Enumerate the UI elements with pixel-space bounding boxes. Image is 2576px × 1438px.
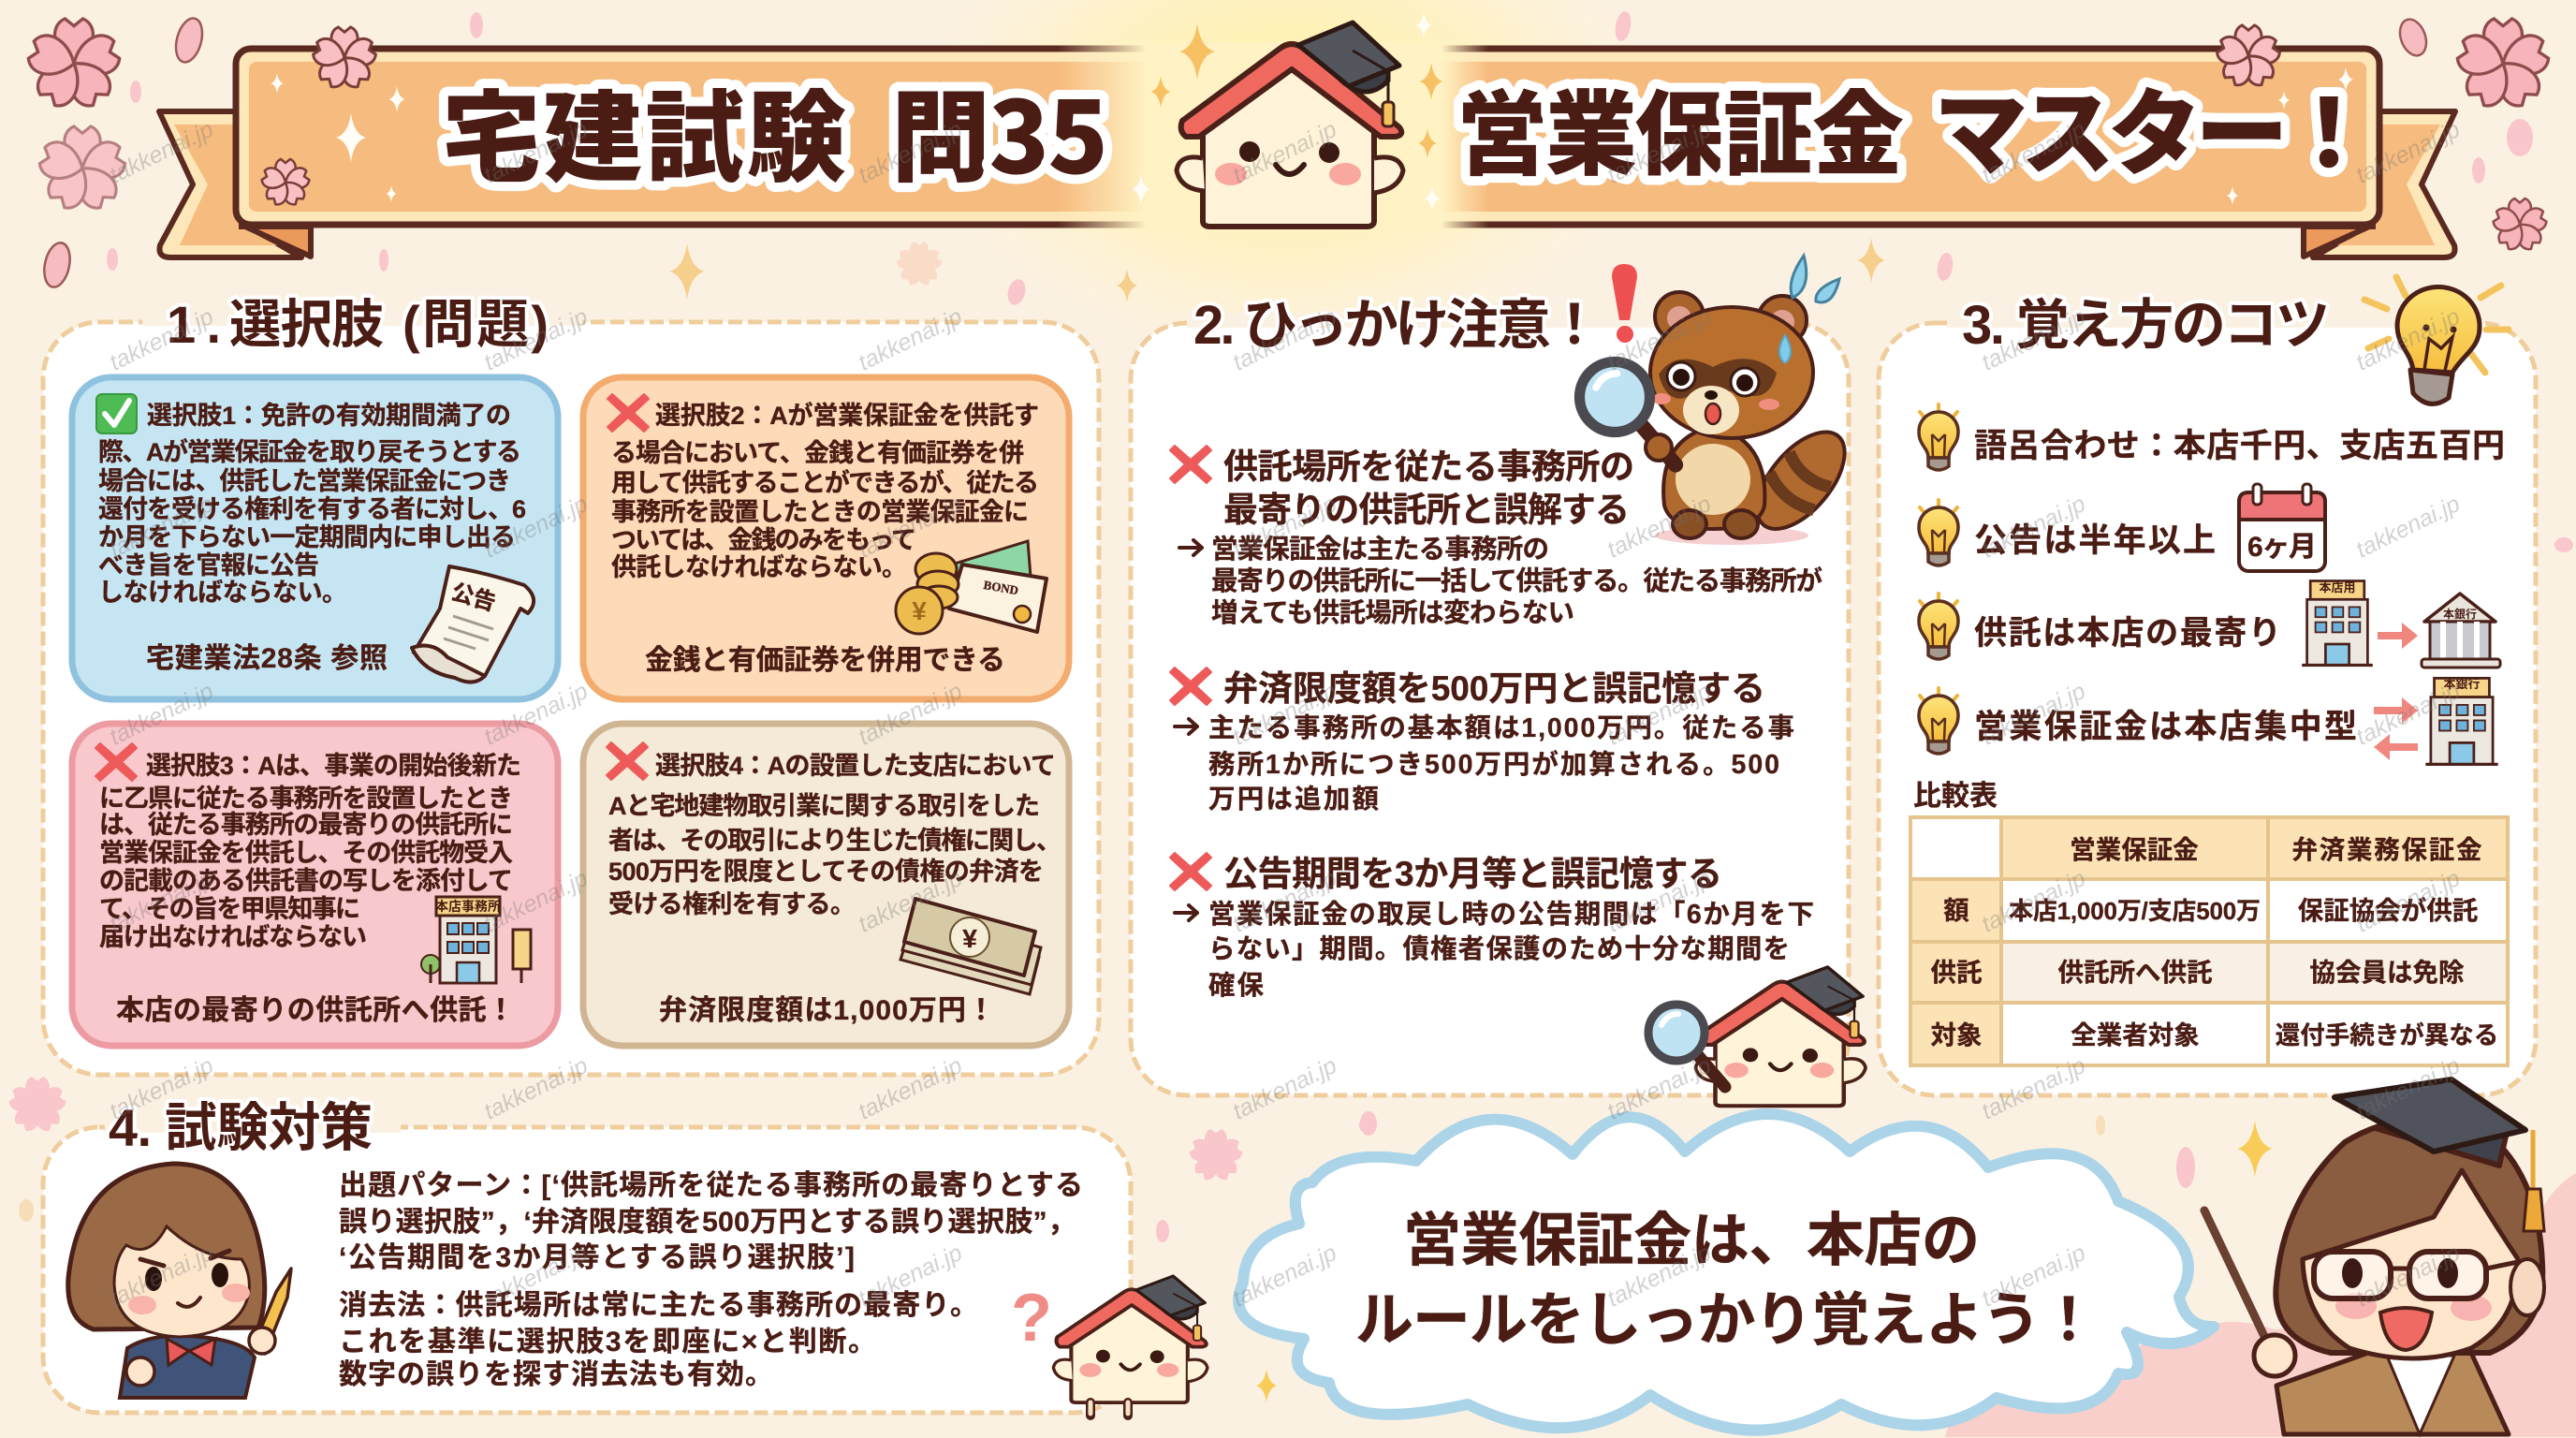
card text xyxy=(608,752,1061,918)
card text: しなければならない。 xyxy=(98,579,347,607)
card footer: 本店の最寄りの供託所へ供託！ xyxy=(116,995,515,1026)
heading 3: 3. 覚え方のコツ xyxy=(1962,295,2330,356)
title right xyxy=(1456,58,2376,194)
question patterns: 出題パターン：[‘供託場所を従たる事務所の最寄りとする xyxy=(339,1170,1083,1201)
icon: notice scroll: 公告 xyxy=(448,580,499,616)
card text: 届け出なければならない xyxy=(99,923,367,951)
card text xyxy=(98,402,526,607)
icon: cross xyxy=(95,743,137,781)
watermarks: takkenai.jp xyxy=(1229,678,1340,751)
heading 1 xyxy=(167,295,549,354)
card footer: 宅建業法28条 参照 xyxy=(146,643,388,674)
tip 2: 公告は半年以上 xyxy=(1974,522,2216,559)
watermarks: takkenai.jp xyxy=(2352,1052,2464,1125)
card text: 際、Aが営業保証金を取り戻そうとする xyxy=(98,437,521,466)
card text: 者は、その取引により生じた債権に関し、 xyxy=(608,827,1061,855)
watermarks: takkenai.jp xyxy=(1603,303,1715,376)
watermarks: takkenai.jp xyxy=(2352,865,2464,938)
trap item 1: 増えても供託場所は変わらない xyxy=(1211,598,1574,628)
title left: 宅建試験 xyxy=(442,58,846,202)
watermarks: takkenai.jp xyxy=(2352,1240,2464,1313)
icon: money and bond: BOND xyxy=(983,578,1019,597)
card text: 選択肢1：免許の有効期間満了の xyxy=(147,402,511,430)
watermarks: takkenai.jp xyxy=(1978,1240,2089,1313)
watermarks: takkenai.jp xyxy=(480,303,592,376)
comparison table: 本店1,000万/支店500万 xyxy=(2009,897,2261,925)
watermarks: takkenai.jp xyxy=(2352,491,2464,564)
icon: red exclamation xyxy=(1612,264,1637,343)
comparison table: 弁済業務保証金 xyxy=(2291,835,2482,864)
card text: 供託しなければならない。 xyxy=(611,553,907,581)
watermarks: takkenai.jp xyxy=(1229,303,1340,376)
card text: 選択肢2：Aが営業保証金を供託す xyxy=(655,401,1039,430)
heading 2: 2. ひっかけ注意！ xyxy=(1193,295,1602,356)
title left xyxy=(442,58,1108,202)
watermarks: takkenai.jp xyxy=(1603,1240,1715,1313)
watermarks: takkenai.jp xyxy=(106,303,217,376)
watermarks: takkenai.jp xyxy=(1603,491,1715,564)
card text: 還付を受ける権利を有する者に対し、6 xyxy=(98,495,526,523)
trap item 1 xyxy=(1170,446,1822,628)
watermarks: takkenai.jp xyxy=(1603,678,1715,751)
bubble text: ルールをしっかり覚えよう！ xyxy=(1355,1288,2098,1353)
watermarks: takkenai.jp xyxy=(2352,678,2464,751)
trap item 2: 万円は追加額 xyxy=(1208,785,1379,814)
bubble text: 営業保証金は、本店の xyxy=(1403,1209,1980,1273)
card text: 500万円を限度としてその債権の弁済を xyxy=(608,858,1044,886)
speech bubble xyxy=(1238,1114,2214,1431)
watermarks: takkenai.jp xyxy=(1978,1052,2089,1125)
icon: arrows to head office xyxy=(2374,677,2498,764)
comparison table: 供託所へ供託 xyxy=(2057,958,2213,987)
question patterns: ‘公告期間を3か月等とする誤り選択肢’] xyxy=(339,1242,855,1273)
pink cloud backdrop xyxy=(1945,1173,2576,1437)
tip 3 xyxy=(1919,594,2281,659)
trap item 1: 最寄りの供託所と誤解する xyxy=(1223,491,1630,529)
icon: money and bond: ¥ xyxy=(912,596,927,625)
watermarks: takkenai.jp xyxy=(855,678,966,751)
icon: tanuki with magnifier xyxy=(1580,256,1861,545)
card text: は、従たる事務所の最寄りの供託所に xyxy=(99,811,513,839)
watermarks: takkenai.jp xyxy=(1603,116,1715,189)
panel: 3 memory tips xyxy=(1879,277,2536,1095)
card text: 用して供託することができるが、従たる xyxy=(611,468,1039,497)
trap item 3: 公告期間を3か月等と誤記憶する xyxy=(1223,855,1722,893)
banner body xyxy=(236,49,2379,225)
icon: banknotes: ¥ xyxy=(962,924,977,953)
card text: ついては、金銭のみをもって xyxy=(611,526,916,554)
card text: に乙県に従たる事務所を設置したとき xyxy=(99,785,513,813)
watermarks: takkenai.jp xyxy=(1978,303,2089,376)
elimination method: 消去法：供託場所は常に主たる事務所の最寄り。 xyxy=(339,1290,978,1321)
icon: check xyxy=(96,394,137,433)
icon: cross xyxy=(607,742,648,780)
banner sparkles xyxy=(271,12,2353,212)
card: choice 2 xyxy=(583,377,1069,699)
tip 1 xyxy=(1919,404,2505,470)
icon: arrows to head office: 本銀行 xyxy=(2443,677,2481,691)
card text: べき旨を官報に公告 xyxy=(98,551,319,580)
comparison table: 供託 xyxy=(1930,958,1983,987)
icon: question house: ? xyxy=(1011,1281,1052,1356)
watermarks: takkenai.jp xyxy=(1229,1052,1340,1125)
watermarks: takkenai.jp xyxy=(106,1240,217,1313)
elimination method xyxy=(339,1290,978,1390)
trap item 2: 務所1か所につき500万円が加算される。500 xyxy=(1208,749,1779,780)
card: choice 4 xyxy=(583,724,1069,1046)
watermarks: takkenai.jp xyxy=(1978,116,2089,189)
card text: 営業保証金を供託し、その供託物受入 xyxy=(99,839,513,867)
trap item 2: 主たる事務所の基本額は1,000万円。従たる事 xyxy=(1208,713,1794,743)
icon: banknotes xyxy=(900,899,1041,994)
comparison table: 額 xyxy=(1943,896,1969,925)
watermarks: takkenai.jp xyxy=(855,116,966,189)
icon: main house mascot xyxy=(1177,22,1403,227)
watermarks: takkenai.jp xyxy=(480,1052,592,1125)
card text: 事務所を設置したときの営業保証金に xyxy=(611,498,1029,526)
comparison table: 全業者対象 xyxy=(2071,1020,2200,1049)
heading 1: (問題) xyxy=(402,295,549,354)
watermarks: takkenai.jp xyxy=(855,1240,966,1313)
banner inner xyxy=(249,62,2366,212)
tip 3: 供託は本店の最寄り xyxy=(1974,615,2281,652)
title left: 問35 xyxy=(891,58,1108,202)
comparison table: 対象 xyxy=(1930,1020,1983,1049)
comparison table: 協会員は免除 xyxy=(2310,958,2465,987)
watermarks: takkenai.jp xyxy=(480,1240,592,1313)
bubble text xyxy=(1355,1209,2098,1353)
trap item 2: 弁済限度額を500万円と誤記憶する xyxy=(1223,669,1765,708)
icon: student girl xyxy=(68,1164,291,1398)
panel: 2 trap warnings xyxy=(1131,256,1866,1106)
question patterns xyxy=(339,1170,1083,1273)
card text: 選択肢3：Aは、事業の開始後新た xyxy=(146,752,521,780)
icon: question house xyxy=(1011,1276,1208,1416)
title right: マスター！ xyxy=(1934,58,2376,194)
comparison table xyxy=(1910,817,2508,1065)
icon: head office to bank: 本店用 xyxy=(2319,580,2356,594)
icon: head office building: 本店事務所 xyxy=(435,899,501,914)
watermarks: takkenai.jp xyxy=(1978,865,2089,938)
card text: 受ける権利を有する。 xyxy=(608,890,856,918)
icon: head office building xyxy=(421,897,531,983)
heading 4: 4. 試験対策 xyxy=(109,1098,373,1157)
comparison table caption: 比較表 xyxy=(1913,781,1998,812)
watermarks: takkenai.jp xyxy=(480,116,592,189)
watermarks: takkenai.jp xyxy=(1229,1240,1340,1313)
panel: 4 exam strategy xyxy=(43,1098,1208,1416)
watermarks: takkenai.jp xyxy=(106,678,217,751)
tip 2 xyxy=(1919,500,2216,565)
trap item 3: らない」期間。債権者保護のため十分な期間を xyxy=(1208,934,1790,964)
comparison table: 還付手続きが異なる xyxy=(2276,1021,2498,1049)
trap item 3: 確保 xyxy=(1208,971,1264,1001)
watermarks: takkenai.jp xyxy=(855,865,966,938)
watermarks: takkenai.jp xyxy=(2352,303,2464,376)
card: choice 1 xyxy=(72,377,558,699)
watermarks: takkenai.jp xyxy=(1229,116,1340,189)
watermarks: takkenai.jp xyxy=(106,1052,217,1125)
comparison table: 営業保証金 xyxy=(2070,835,2199,864)
heading 1: 1. xyxy=(167,295,221,354)
icon: calendar 6 months xyxy=(2239,484,2325,571)
icon: calendar 6 months: 6ヶ月 xyxy=(2247,532,2317,563)
elimination method: これを基準に選択肢3を即座に×と判断。 xyxy=(339,1327,876,1357)
card text: の記載のある供託書の写しを添付して xyxy=(99,867,513,895)
left ribbon tail xyxy=(159,111,311,257)
icon: cross xyxy=(607,394,649,432)
title banner xyxy=(25,12,2552,257)
tip 1: 語呂合わせ：本店千円、支店五百円 xyxy=(1974,428,2505,464)
tip 4 xyxy=(1919,688,2357,754)
elimination method: 数字の誤りを探す消去法も有効。 xyxy=(339,1359,773,1390)
card text xyxy=(611,401,1039,581)
card footer: 弁済限度額は1,000万円！ xyxy=(659,995,995,1026)
watermarks: takkenai.jp xyxy=(1978,678,2089,751)
card text: る場合において、金銭と有価証券を併 xyxy=(611,439,1024,467)
card text: 選択肢4：Aの設置した支店において xyxy=(655,752,1056,780)
watermarks: takkenai.jp xyxy=(1603,865,1715,938)
watermarks: takkenai.jp xyxy=(1978,491,2089,564)
title right: 営業保証金 xyxy=(1456,61,1904,194)
watermarks: takkenai.jp xyxy=(480,678,592,751)
tip 4: 営業保証金は本店集中型 xyxy=(1974,709,2357,745)
watermarks: takkenai.jp xyxy=(106,491,217,564)
icon: money and bond xyxy=(896,541,1046,634)
question patterns: 誤り選択肢”，‘弁済限度額を500万円とする誤り選択肢”， xyxy=(339,1207,1076,1238)
icon: large light bulb xyxy=(2364,277,2509,404)
watermarks: takkenai.jp xyxy=(106,116,217,189)
card text: Aと宅地建物取引業に関する取引をした xyxy=(608,792,1040,820)
trap item 1: 最寄りの供託所に一括して供託する。従たる事務所が xyxy=(1211,565,1822,596)
trap item 3: 営業保証金の取戻し時の公告期間は「6か月を下 xyxy=(1208,900,1814,930)
card text: て、その旨を甲県知事に xyxy=(99,895,360,923)
card footer: 金銭と有価証券を併用できる xyxy=(645,645,1005,676)
banner flowers xyxy=(25,19,2552,253)
watermarks: takkenai.jp xyxy=(480,865,592,938)
right ribbon tail xyxy=(2304,111,2455,257)
watermarks: takkenai.jp xyxy=(106,865,217,938)
panel: 1 choices xyxy=(43,295,1099,1075)
heading 1: 選択肢 xyxy=(229,295,384,354)
comparison table: 保証協会が供託 xyxy=(2298,896,2478,925)
trap item 1: 供託場所を従たる事務所の xyxy=(1223,448,1634,486)
watermarks: takkenai.jp xyxy=(1229,491,1340,564)
watermarks: takkenai.jp xyxy=(855,1052,966,1125)
trap item 2 xyxy=(1170,668,1794,814)
banner centre fade xyxy=(1058,42,1488,231)
watermarks: takkenai.jp xyxy=(1229,865,1340,938)
watermarks: takkenai.jp xyxy=(855,491,966,564)
card text: か月を下らない一定期間内に申し出る xyxy=(98,523,516,551)
watermarks: takkenai.jp xyxy=(2352,116,2464,189)
card text: 場合には、供託した営業保証金につき xyxy=(98,467,511,495)
icon: teacher character xyxy=(2204,1079,2544,1434)
watermarks: takkenai.jp xyxy=(480,491,592,564)
icon: head office to bank xyxy=(2302,580,2500,668)
watermarks: takkenai.jp xyxy=(1603,1052,1715,1125)
icon: notice scroll xyxy=(412,566,534,682)
card: choice 3 xyxy=(72,724,558,1046)
watermarks: takkenai.jp xyxy=(855,303,966,376)
card text xyxy=(99,752,521,951)
trap item 3 xyxy=(1170,853,1814,1001)
trap item 1: 営業保証金は主たる事務所の xyxy=(1211,535,1549,565)
icon: head office to bank: 本銀行 xyxy=(2443,607,2477,621)
icon: house with magnifier xyxy=(1648,967,1866,1106)
